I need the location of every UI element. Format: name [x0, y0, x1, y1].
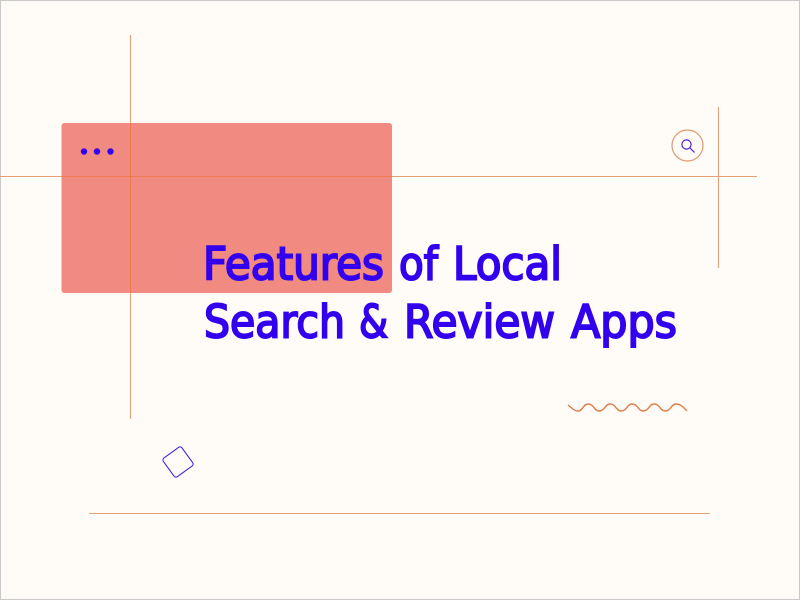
title: Apps — [571, 296, 677, 348]
title: Search — [204, 296, 345, 348]
diamond outline — [162, 446, 194, 478]
wavy line decoration — [568, 404, 687, 411]
panel: coral rectangle — [62, 123, 392, 293]
title: Review — [404, 296, 555, 348]
title: Features — [203, 238, 384, 290]
title: of — [399, 238, 439, 290]
title: & — [359, 296, 388, 348]
icon: search magnifier in circle — [672, 130, 703, 161]
title: Local — [453, 238, 562, 290]
icon: three dots — [81, 148, 114, 155]
